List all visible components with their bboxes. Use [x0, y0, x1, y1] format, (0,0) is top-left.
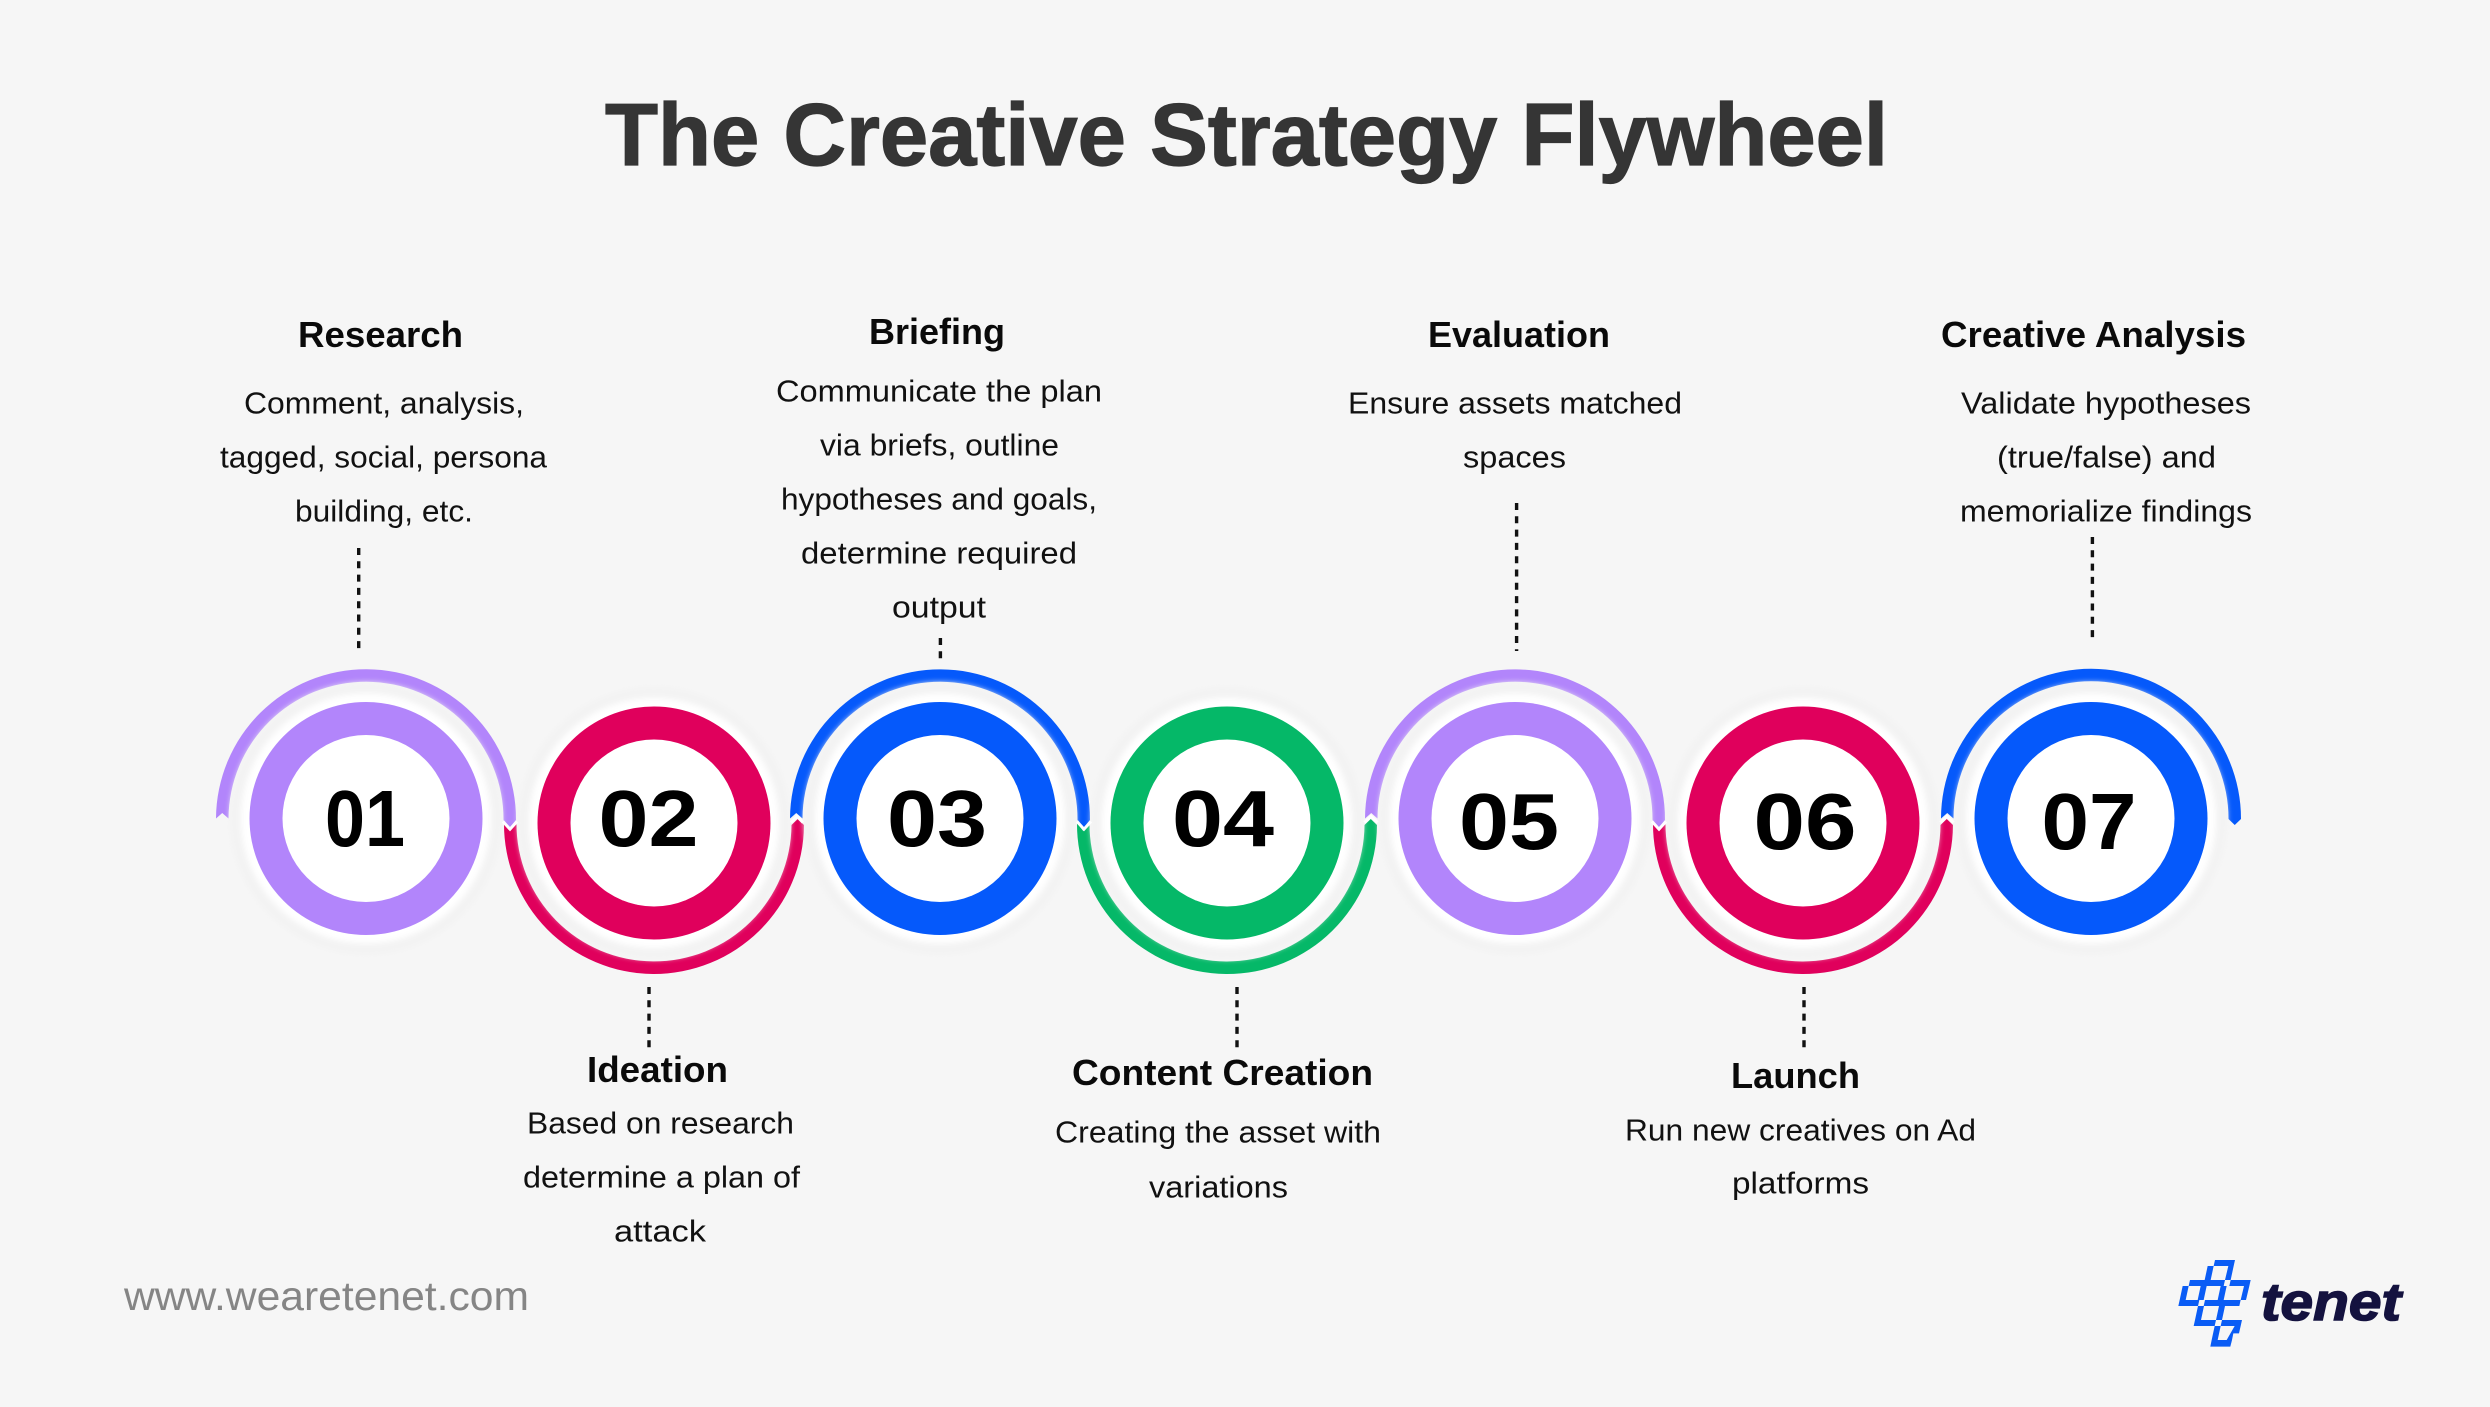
heading: Launch: Launch [1731, 1055, 1860, 1096]
flow arc 04 [1077, 819, 1377, 974]
connector line 04 [1235, 987, 1239, 1050]
step 07: Creative Analysis [1941, 314, 2252, 954]
description: Content Creation: Creating the asset with [1055, 1115, 1381, 1150]
heading: Content Creation: Content Creation [1072, 1052, 1373, 1093]
description: Evaluation: spaces [1463, 440, 1566, 475]
connector line 01 [357, 548, 360, 653]
description: Launch: Run new creatives on Ad [1625, 1113, 1976, 1148]
number badge 07 [1955, 682, 2227, 954]
description: Content Creation: variations [1149, 1170, 1288, 1205]
number badge 04 [1091, 687, 1363, 959]
heading: Ideation: Ideation [587, 1049, 728, 1090]
description: Ideation: attack [614, 1214, 707, 1249]
description: Briefing: determine required [801, 536, 1077, 571]
connector line 03 [939, 638, 942, 660]
step 02: Ideation [504, 687, 804, 1249]
flow arc 06 [1653, 819, 1953, 974]
heading: Research: Research [298, 314, 463, 355]
step 03: Briefing [776, 311, 1102, 954]
description: Research: building, etc. [295, 494, 473, 529]
number badge 04: 04 [1172, 774, 1275, 863]
number badge 03: 03 [887, 774, 987, 863]
description: Ideation: determine a plan of [523, 1160, 800, 1195]
description: Creative Analysis [1960, 386, 2252, 529]
description: Briefing: output [892, 590, 986, 625]
number badge 05: 05 [1459, 777, 1559, 866]
description: Launch: platforms [1732, 1166, 1869, 1201]
logo wordmark: tenet [2261, 1273, 2404, 1332]
description: Ideation [523, 1106, 800, 1249]
description: Research: Comment, analysis, [244, 386, 524, 421]
number badge 03 [804, 682, 1076, 954]
description: Briefing [776, 374, 1102, 625]
connector line 02 [647, 987, 651, 1050]
description: Creative Analysis: (true/false) and [1997, 440, 2216, 475]
number badge 06: 06 [1754, 777, 1856, 866]
website URL: www.wearetenet.com [123, 1273, 529, 1319]
description: Launch [1625, 1113, 1976, 1201]
description: Briefing: via briefs, outline [820, 428, 1059, 463]
description: Evaluation [1348, 386, 1682, 475]
description: Creative Analysis: Validate hypotheses [1961, 386, 2251, 421]
flow arc 03 [790, 669, 1090, 828]
connector line 07 [2091, 537, 2094, 642]
description: Briefing: hypotheses and goals, [781, 482, 1097, 517]
step 01: Research [216, 314, 548, 954]
description: Ideation: Based on research [527, 1106, 794, 1141]
number badge 02: 02 [598, 774, 698, 863]
description: Research: tagged, social, persona [220, 440, 548, 475]
flow arc 02 [504, 819, 804, 974]
heading: Evaluation: Evaluation [1428, 314, 1610, 355]
description: Content Creation [1055, 1115, 1381, 1205]
flow arc 01 [216, 669, 516, 828]
step 05: Evaluation [1348, 314, 1682, 954]
step 06: Launch [1625, 687, 1976, 1201]
number badge 07: 07 [2042, 777, 2136, 866]
icon: tenet blue grid mark [2178, 1260, 2251, 1347]
tenet logo [2178, 1260, 2404, 1347]
step 04: Content Creation [1055, 687, 1381, 1205]
connector line 05 [1515, 503, 1518, 651]
description: Creative Analysis: memorialize findings [1960, 494, 2252, 529]
heading: Briefing: Briefing [869, 311, 1005, 352]
description: Research [220, 386, 548, 529]
description: Briefing: Communicate the plan [776, 374, 1102, 409]
number badge 05 [1379, 682, 1651, 954]
heading: Creative Analysis: Creative Analysis [1941, 314, 2246, 355]
number badge 01 [230, 682, 502, 954]
number badge 01: 01 [325, 774, 405, 863]
number badge 02 [518, 687, 790, 959]
title: The Creative Strategy Flywheel [605, 85, 1888, 184]
flow arc 07 [1941, 669, 2241, 825]
flow arc 05 [1365, 669, 1665, 828]
description: Evaluation: Ensure assets matched [1348, 386, 1682, 421]
connector line 06 [1802, 987, 1806, 1053]
number badge 06 [1667, 687, 1939, 959]
